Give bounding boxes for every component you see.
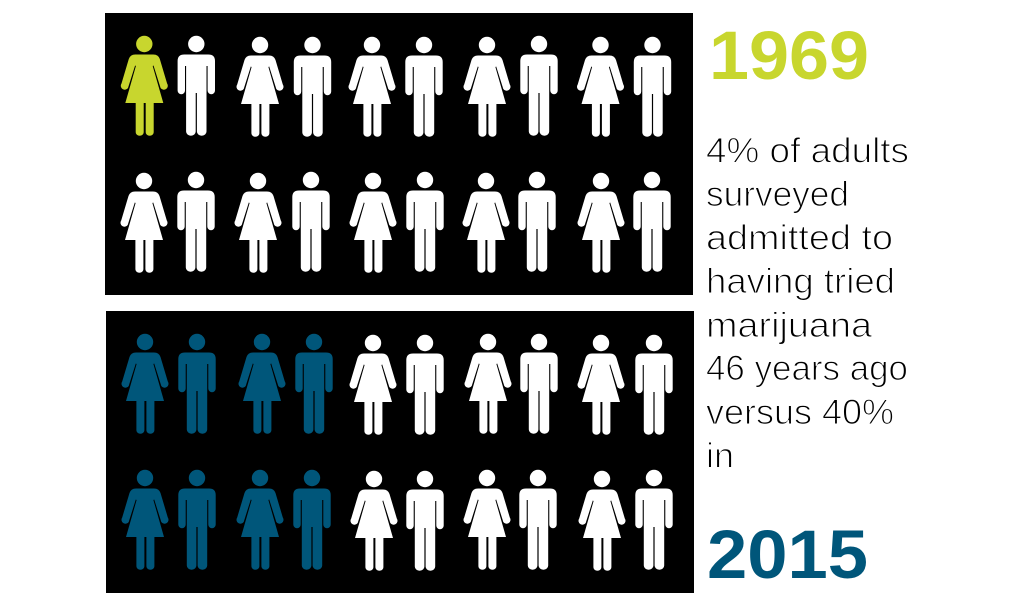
- text block: comparison statement: 46 years ago: [706, 349, 908, 388]
- text block: comparison statement: [706, 132, 909, 476]
- text block: comparison statement: surveyed: [706, 175, 849, 214]
- white figures, 1969: [120, 36, 671, 273]
- text block: comparison statement: 4% of adults: [706, 132, 909, 170]
- heading: 2015: 2015: [707, 516, 868, 593]
- text block: comparison statement: admitted to: [706, 218, 893, 258]
- text block: comparison statement: having tried: [706, 262, 895, 301]
- heading: 1969: 1969: [709, 17, 869, 94]
- text block: comparison statement: in: [706, 436, 734, 476]
- panel: 2015 pictogram: [106, 311, 694, 593]
- text block: comparison statement: versus 40%: [706, 393, 894, 432]
- highlighted figures: 40 percent: [121, 334, 333, 570]
- white figures, 2015: [349, 334, 673, 571]
- panel: 1969 pictogram: [105, 13, 693, 295]
- text block: comparison statement: marijuana: [706, 306, 873, 345]
- highlighted woman: 4 percent: [121, 36, 168, 136]
